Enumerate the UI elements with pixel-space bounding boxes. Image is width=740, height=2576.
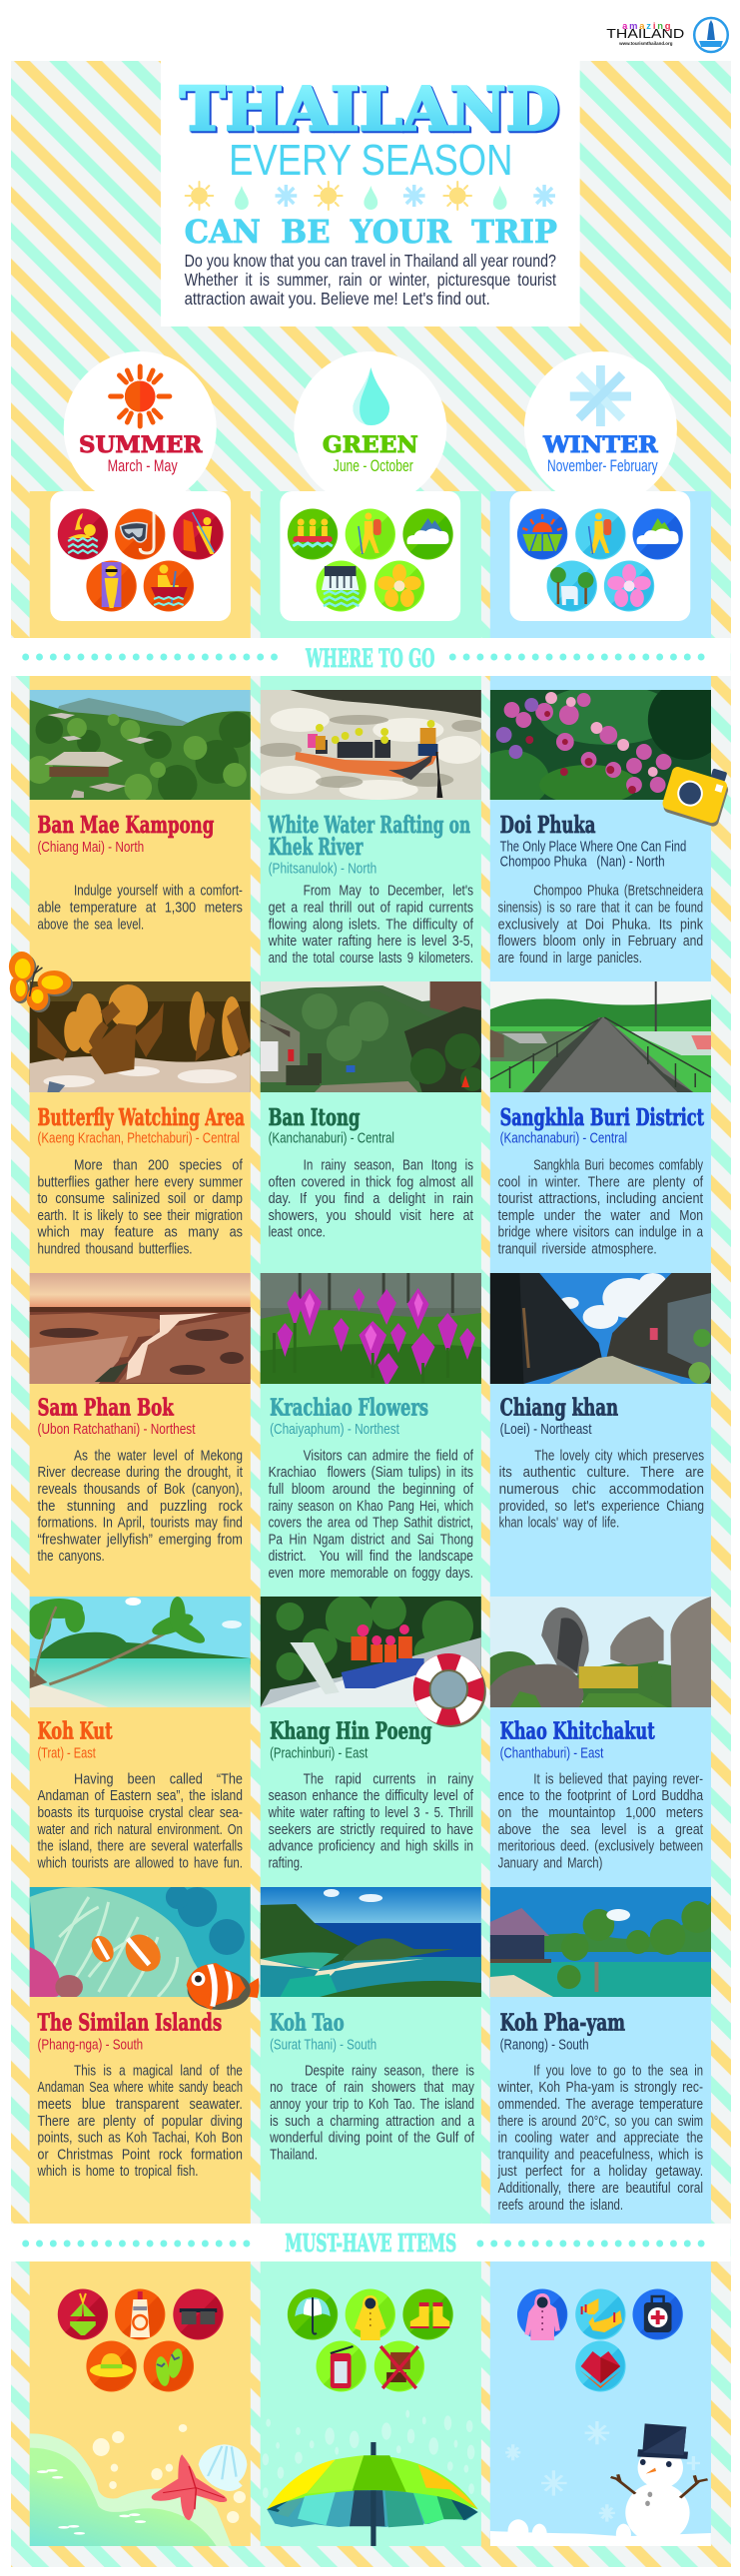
logos bbox=[606, 18, 728, 52]
photo: wooden bridge bbox=[489, 981, 711, 1092]
icon: rain boots bbox=[402, 2288, 453, 2340]
body text bbox=[269, 1157, 473, 1241]
location: (Chiang Mai) - North bbox=[38, 840, 144, 856]
panel: title bbox=[161, 61, 580, 326]
panel: summer items bbox=[30, 2261, 251, 2546]
intro text bbox=[185, 251, 556, 309]
icon: crossed luggage bbox=[374, 2340, 424, 2392]
location: (Loei) - Northeast bbox=[500, 1422, 592, 1438]
body text: annoy your trip to Koh Tao. The island bbox=[270, 2097, 474, 2113]
card: Ban Mae Kampong bbox=[26, 690, 255, 933]
title: Koh Tao bbox=[270, 2010, 345, 2036]
body text: ence to the footprint of Lord Buddha bbox=[498, 1788, 703, 1804]
icon: swimming bbox=[58, 509, 108, 559]
label: green: GREEN bbox=[323, 432, 418, 458]
body text: the island, there are several waterfalls bbox=[38, 1839, 243, 1855]
title: Krachiao Flowers bbox=[270, 1395, 428, 1421]
title: Koh Pha-yam bbox=[500, 2010, 625, 2036]
body text: Visitors can admire the field of bbox=[304, 1448, 474, 1464]
body text: It is believed that paying rever- bbox=[533, 1771, 703, 1787]
photo: palm beach bbox=[30, 1597, 251, 1707]
card: Similan Islands bbox=[30, 1885, 260, 2180]
body text: white water rafting here is level 3-5, bbox=[268, 934, 473, 950]
body text: district. You will find the landscape bbox=[269, 1549, 473, 1565]
icon: sunrise field bbox=[517, 509, 567, 559]
body text: Krachiao flowers (Siam tulips) in its bbox=[269, 1465, 473, 1481]
body text: rafting. bbox=[269, 1855, 303, 1871]
body text: The lovely city which preserves bbox=[534, 1448, 704, 1464]
dates: green: June - October bbox=[334, 457, 413, 475]
body text: white water rafting to level 3 - 5. Thrill bbox=[268, 1805, 473, 1821]
body text: January and March) bbox=[498, 1855, 602, 1871]
icon: snowflake bbox=[570, 365, 631, 426]
body text: meets blue transparent seawater. bbox=[38, 2097, 243, 2113]
season: winter bbox=[524, 351, 677, 506]
body text: From May to December, let's bbox=[304, 884, 473, 900]
icon group: winter activities bbox=[517, 509, 683, 611]
title: Ban Itong bbox=[269, 1105, 360, 1131]
location: (Chaiyaphum) - Northest bbox=[270, 1422, 399, 1438]
title: Sam Phan Bok bbox=[38, 1395, 175, 1421]
title: Chiang khan bbox=[500, 1395, 618, 1421]
logo: amazing thailand: amazing bbox=[622, 21, 671, 32]
icon row: sun, drop, snow bbox=[186, 182, 555, 210]
body text: the stunning and puzzling rock bbox=[38, 1499, 244, 1515]
body text: no trace of rain showers that may bbox=[270, 2080, 475, 2096]
body text bbox=[498, 1771, 703, 1871]
icon: clownfish bbox=[187, 1963, 260, 2010]
photo: mountain village bbox=[30, 690, 251, 800]
title: Butterfly Watching Area bbox=[38, 1105, 245, 1131]
body text: There are plenty of popular diving bbox=[38, 2114, 243, 2130]
photo: rafting rapids bbox=[260, 690, 481, 800]
body text: reveals thousands of Bok (canyon), bbox=[38, 1482, 243, 1498]
body text: points, such as Koh Tachai, Koh Bon bbox=[38, 2131, 243, 2147]
body text: even more memorable on foggy days. bbox=[269, 1566, 473, 1582]
title: Khao Khitchakut bbox=[500, 1718, 655, 1744]
heading: can be your trip: CAN BE YOUR TRIP bbox=[185, 214, 557, 251]
body text: often covered in thick fog almost all bbox=[269, 1174, 473, 1190]
location: (Kanchanaburi) - Central bbox=[269, 1130, 394, 1147]
body text: Having been called “The bbox=[74, 1771, 243, 1787]
body text: season enhance the difficulty level of bbox=[269, 1788, 474, 1804]
title: White Water Rafting on bbox=[268, 813, 470, 839]
card: Sangkhla Buri District bbox=[490, 981, 711, 1258]
body text: tranquility and peacefulness, which is bbox=[498, 2147, 703, 2163]
body text: The rapid currents in rainy bbox=[304, 1771, 474, 1787]
logo: amazing thailand: THAILAND bbox=[606, 26, 684, 41]
body text bbox=[269, 2063, 475, 2163]
card: Ban Itong bbox=[261, 981, 484, 1241]
icon: bikini bbox=[58, 2288, 108, 2340]
body text: reefs around the island. bbox=[498, 2198, 623, 2214]
illustration: snowman scene bbox=[490, 2421, 711, 2546]
body text: Thailand. bbox=[270, 2147, 318, 2163]
icon: raincoat bbox=[346, 2288, 395, 2340]
icon: pink coat bbox=[517, 2288, 567, 2340]
photo: old street bbox=[489, 1273, 711, 1384]
body text: which tourists are allowed to have fun. bbox=[37, 1855, 243, 1871]
photo: siam tulips bbox=[260, 1273, 481, 1384]
body text bbox=[498, 884, 704, 966]
body text bbox=[499, 1448, 704, 1532]
icon group: summer activities bbox=[58, 509, 224, 611]
logo: amazing thailand: www.tourismthailand.org bbox=[618, 41, 673, 46]
icon: scarf bbox=[575, 2288, 626, 2340]
body text bbox=[498, 1157, 704, 1258]
body text: provided, so let's experience Chiang bbox=[499, 1499, 704, 1515]
body text: Andaman Sea where white sandy beach bbox=[38, 2080, 243, 2096]
heading band: must-have items bbox=[11, 2224, 731, 2261]
body text: Indulge yourself with a comfort- bbox=[74, 884, 243, 900]
body text bbox=[37, 1771, 243, 1871]
title: Ban Mae Kampong bbox=[38, 813, 214, 839]
icon: waterfall dam bbox=[316, 561, 367, 611]
panel: rainy items bbox=[261, 2261, 481, 2546]
photo: giant boulders bbox=[489, 1597, 711, 1707]
card: White Water Rafting: Khek River bbox=[269, 835, 364, 861]
body text: boasts its turquoise crystal clear sea- bbox=[38, 1805, 243, 1821]
intro text: Do you know that you can travel in Thailand all year round? bbox=[185, 251, 556, 271]
body text bbox=[268, 1771, 474, 1871]
dots left bbox=[26, 2241, 261, 2247]
card: Doi Phuka bbox=[470, 680, 733, 966]
card: Khao Khitchakut bbox=[480, 1597, 711, 1871]
title: Khang Hin Poeng bbox=[270, 1718, 432, 1744]
label: winter: WINTER bbox=[542, 432, 659, 458]
body text: are found in large panicles. bbox=[498, 951, 642, 966]
photo: island bay bbox=[260, 1887, 481, 1997]
location: (Chanthaburi) - East bbox=[500, 1745, 603, 1761]
location: (Prachinburi) - East bbox=[270, 1745, 368, 1761]
card: Koh Tao bbox=[261, 1887, 481, 2163]
body text: exclusively at Doi Phuka. Its pink bbox=[498, 917, 704, 933]
body text: wonderful diving point of the Gulf of bbox=[269, 2131, 475, 2147]
body text: to consume salinized soil or damp bbox=[38, 1191, 243, 1207]
season panels background bbox=[30, 491, 711, 638]
body text: temple under the water and Mon bbox=[498, 1208, 703, 1224]
icon: trekking bbox=[346, 509, 395, 559]
icon: camera bbox=[660, 757, 733, 828]
body text: on the mountaintop 1,000 meters bbox=[498, 1805, 703, 1821]
title: Doi Phuka bbox=[500, 813, 596, 839]
dots right bbox=[480, 2241, 715, 2247]
body text: full bloom around the beginning of bbox=[269, 1482, 474, 1498]
body text: least once. bbox=[269, 1225, 326, 1241]
icon: trekking bbox=[575, 509, 626, 559]
body text: “freshwater jellyfish” emerging from bbox=[38, 1532, 243, 1548]
icon: flip-flops bbox=[144, 2340, 194, 2392]
body text bbox=[37, 2063, 243, 2180]
illustration: shell bbox=[199, 2444, 247, 2491]
body text: hundred thousand butterflies. bbox=[38, 1241, 193, 1258]
logo: round seal bbox=[694, 18, 728, 52]
body text: is such a charming attraction and a bbox=[270, 2114, 474, 2130]
body text: ommended. The average temperature bbox=[498, 2097, 703, 2113]
body text: In rainy season, Ban Itong is bbox=[304, 1157, 473, 1174]
season: green bbox=[294, 351, 446, 506]
body text: get a real thrill out of rapid currents bbox=[269, 900, 473, 917]
icon: climbing bbox=[173, 509, 224, 559]
body text: Andaman of Eastern sea”, the island bbox=[38, 1788, 243, 1804]
icon: umbrella bbox=[288, 2288, 338, 2340]
season: summer bbox=[64, 351, 217, 506]
title: Thailand: THAILAND bbox=[180, 75, 559, 145]
body text bbox=[269, 1448, 474, 1582]
dots right bbox=[452, 653, 715, 661]
card: Koh Kut bbox=[28, 1597, 251, 1871]
icon: yellow flower bbox=[374, 561, 424, 611]
location: (Ranong) - South bbox=[500, 2037, 589, 2053]
title: Koh Kut bbox=[38, 1718, 113, 1744]
icon: snorkel bbox=[115, 509, 165, 559]
body text: tranquil riverside atmosphere. bbox=[498, 1241, 657, 1258]
body text: covers the area od Thep Sathit district, bbox=[269, 1516, 473, 1532]
heading band: where to go bbox=[11, 638, 731, 676]
body text bbox=[37, 1157, 244, 1258]
body text: flowing along islets. The difficulty of bbox=[269, 917, 474, 933]
intro text: attraction await you. Believe me! Let's find out. bbox=[185, 289, 490, 309]
body text bbox=[38, 884, 243, 933]
icon: water drop bbox=[354, 367, 389, 425]
location: (Kaeng Krachan, Phetchaburi) - Central bbox=[38, 1130, 240, 1147]
card: Koh Pha-yam bbox=[490, 1887, 713, 2214]
illustration: starfish bbox=[152, 2454, 227, 2520]
body text: numerous chic accommodation bbox=[499, 1482, 704, 1498]
heading text: MUST-HAVE ITEMS bbox=[285, 2230, 456, 2257]
location: (Ubon Ratchathani) - Northest bbox=[38, 1422, 196, 1438]
photo: rafting in forest bbox=[260, 1597, 481, 1707]
body text bbox=[497, 2063, 703, 2214]
body text bbox=[38, 1448, 244, 1565]
body text: formations. In April, tourists may find bbox=[38, 1516, 243, 1532]
illustration: big umbrella bbox=[267, 2442, 478, 2546]
logo: amazing thailand bbox=[606, 21, 684, 46]
icon: first aid bbox=[632, 2288, 683, 2340]
card: White Water Rafting bbox=[259, 690, 483, 966]
icon group: green season activities bbox=[288, 509, 453, 611]
icon: waterproof pouch bbox=[316, 2340, 367, 2392]
icon: lifebuoy bbox=[415, 1655, 486, 1727]
panel: winter items bbox=[490, 2261, 711, 2546]
icon: boating bbox=[144, 561, 194, 611]
body text: and the total course lasts 9 kilometers. bbox=[269, 951, 473, 966]
photo: pink flowers bbox=[489, 690, 711, 800]
body text: just perfect for a holiday getaway. bbox=[497, 2164, 703, 2180]
icon: pink flower bbox=[604, 561, 654, 611]
card: Khang Hin Poeng bbox=[261, 1594, 486, 1871]
location: The Only Place Where One Can Find bbox=[500, 839, 686, 855]
body text: This is a magical land of the bbox=[74, 2063, 243, 2079]
heading text: WHERE TO GO bbox=[306, 644, 434, 673]
icon: elephant and trees bbox=[547, 561, 597, 611]
body text: in cooling water and appreciate the bbox=[498, 2131, 703, 2147]
location: (Surat Thani) - South bbox=[270, 2037, 376, 2053]
heading: every season: EVERY SEASON bbox=[229, 136, 513, 185]
location: (Kanchanaburi) - Central bbox=[500, 1130, 627, 1147]
body text: earth. It is likely to see their migration bbox=[38, 1208, 243, 1224]
body text: winter, Koh Pha-yam is strongly rec- bbox=[497, 2080, 703, 2096]
body text: which is home to tropical fish. bbox=[37, 2164, 198, 2180]
photo: canyon at sunset bbox=[30, 1273, 251, 1384]
body text: or Christmas Point rock formation bbox=[38, 2147, 243, 2163]
label: summer: SUMMER bbox=[79, 432, 203, 458]
body text: khan locals' way of life. bbox=[499, 1516, 619, 1532]
body text: showers, you should visit here at bbox=[269, 1208, 473, 1224]
body text: cool in winter. There are plenty of bbox=[498, 1174, 704, 1190]
body text: water and rich natural environment. On bbox=[37, 1822, 243, 1838]
location: Chompoo Phuka (Nan) - North bbox=[500, 854, 665, 870]
location: (Phang-nga) - South bbox=[38, 2037, 143, 2053]
card: Butterfly Watching Area bbox=[9, 952, 251, 1258]
icon: mountain clouds bbox=[402, 509, 453, 559]
location: (Trat) - East bbox=[38, 1745, 96, 1761]
card: Sam Phan Bok bbox=[30, 1273, 251, 1565]
body text: flowers bloom only in February and bbox=[498, 934, 703, 950]
illustration: beach bbox=[30, 2424, 247, 2546]
body text: above the sea level. bbox=[38, 917, 144, 933]
body text: tourist attractions, including ancient bbox=[498, 1191, 703, 1207]
icon: sunscreen bbox=[115, 2288, 165, 2340]
body text: its authentic culture. There are bbox=[499, 1465, 704, 1481]
body text: Additionally, there are beautiful coral bbox=[498, 2181, 703, 2197]
body text bbox=[268, 884, 474, 966]
body text: As the water level of Mekong bbox=[74, 1448, 243, 1464]
icon: butterfly bbox=[9, 952, 73, 1012]
photo: clownfish and anemone bbox=[30, 1887, 251, 1997]
card: Krachiao Flowers bbox=[261, 1273, 481, 1582]
location bbox=[500, 839, 686, 870]
dates: winter: November- February bbox=[547, 457, 658, 475]
illustration: raindrops bbox=[263, 2410, 474, 2498]
icon: sunbathing bbox=[86, 561, 137, 611]
body text: More than 200 species of bbox=[74, 1157, 244, 1174]
column backgrounds bbox=[30, 676, 711, 2224]
icon: folded shawl bbox=[575, 2340, 626, 2392]
icon: rafting bbox=[288, 509, 338, 559]
icon: sun bbox=[111, 366, 170, 426]
intro text: Whether it is summer, rain or winter, picturesque tourist bbox=[185, 270, 556, 290]
icon: sunglasses bbox=[173, 2288, 224, 2340]
photo: butterflies bbox=[30, 981, 251, 1092]
icon: hat bbox=[86, 2340, 137, 2392]
location: (Phitsanulok) - North bbox=[269, 861, 376, 878]
body text: which may feature as many as bbox=[37, 1225, 243, 1241]
body text: able temperature at 1,300 meters bbox=[38, 900, 243, 917]
body text: butterflies gather here every summer bbox=[38, 1174, 243, 1190]
icon: mountain clouds bbox=[632, 509, 683, 559]
body text: seekers are strictly required to have bbox=[269, 1822, 473, 1838]
body text: Despite rainy season, there is bbox=[305, 2063, 474, 2079]
title: The Similan Islands bbox=[38, 2010, 222, 2036]
dots left bbox=[26, 653, 288, 661]
body text: advance proficiency and high skills in bbox=[269, 1839, 473, 1855]
photo: mangrove hut bbox=[489, 1887, 711, 1997]
body text: the canyons. bbox=[38, 1549, 105, 1565]
body text: day. If you find a delight in rain bbox=[269, 1191, 473, 1207]
body text: River decrease during the drought, it bbox=[38, 1465, 243, 1481]
body text: above the sea level is a great bbox=[498, 1822, 703, 1838]
body text: Pa Hin Ngam district and Sai Thong bbox=[269, 1532, 473, 1548]
photo: foggy village bbox=[260, 981, 481, 1092]
body text: rainy season on Khao Pang Hei, which bbox=[269, 1499, 473, 1515]
card: Chiang khan bbox=[490, 1273, 711, 1532]
dates: summer: March - May bbox=[108, 457, 178, 475]
